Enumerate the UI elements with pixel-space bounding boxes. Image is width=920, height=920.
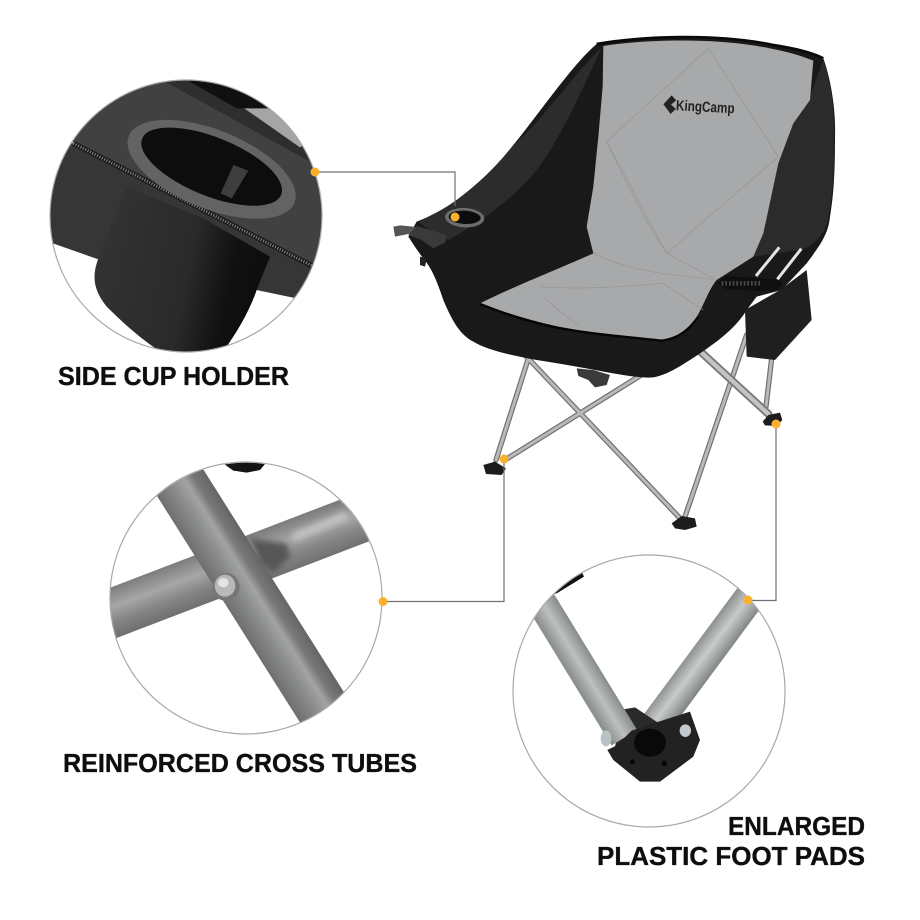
black webbing top	[166, 80, 310, 162]
left side panel dark strip	[418, 48, 601, 240]
circle outline	[50, 80, 322, 352]
left tube	[535, 592, 624, 738]
right bolt	[680, 724, 691, 737]
chair frame tubes	[496, 335, 773, 520]
black frame end	[554, 573, 584, 594]
panel: side cup holder	[49, 79, 323, 386]
cup holder opening	[448, 210, 481, 225]
chair body black outline	[408, 37, 835, 378]
circle outline	[110, 462, 382, 734]
right side panel	[753, 60, 834, 257]
diagonal tube	[170, 467, 330, 720]
detail photo: cup holder	[50, 80, 322, 352]
armrest handle	[393, 225, 420, 237]
black rim at top	[188, 80, 268, 108]
tube shadow at crossing	[250, 538, 290, 573]
holder inner tab	[221, 165, 248, 198]
seat front edge line	[480, 304, 698, 341]
rivet	[212, 573, 240, 601]
gray padded back and seat	[480, 41, 813, 340]
rivet glint	[218, 578, 229, 587]
heading: SIDE CUP HOLDER	[58, 363, 289, 391]
orange marker dots	[310, 168, 780, 606]
rear block piece	[615, 707, 660, 747]
cup pocket	[95, 187, 270, 353]
lower fabric band under the seam	[50, 143, 311, 298]
heading: PLASTIC FOOT PADS	[597, 843, 865, 871]
right arm strap	[717, 276, 783, 292]
back top edge line	[597, 37, 823, 58]
left bolt	[601, 730, 611, 746]
foot pad left	[483, 462, 506, 475]
holder hole	[141, 128, 282, 206]
plastic foot block	[607, 712, 700, 782]
panel: enlarged plastic foot pads	[513, 555, 865, 871]
left arm flap	[420, 257, 427, 267]
cup holder on chair	[445, 207, 485, 228]
tube highlight	[293, 515, 347, 537]
heading: ENLARGED	[728, 813, 865, 841]
rivet highlight	[215, 575, 235, 597]
right tube	[655, 590, 755, 725]
white webbing strips	[756, 247, 801, 279]
frame joint mechanism	[577, 368, 610, 387]
panel: reinforced cross tubes	[63, 460, 417, 778]
cup holder rim	[445, 207, 485, 228]
zipper seam	[73, 143, 315, 267]
black foot at top	[224, 462, 265, 473]
logo wordmark: KingCamp	[676, 98, 735, 117]
logo diamond	[663, 95, 677, 114]
connector line: cup holder	[315, 172, 455, 206]
zipper seam dots	[73, 143, 315, 267]
holder ring	[128, 120, 296, 219]
horizontal tube	[103, 513, 373, 617]
heading	[597, 813, 865, 871]
chair product photo	[393, 37, 835, 530]
left armrest	[408, 226, 447, 248]
white-gray reflection	[244, 108, 302, 148]
KingCamp logo	[663, 95, 735, 117]
foot pad right	[763, 413, 782, 426]
detail photo: foot pad	[535, 572, 755, 782]
connector line: foot pads	[748, 424, 776, 600]
side cooler bag	[745, 270, 812, 360]
detail photo: crossed tubes	[103, 460, 373, 720]
top surface of arm	[72, 82, 322, 264]
heading: REINFORCED CROSS TUBES	[63, 750, 417, 778]
socket hole	[634, 729, 666, 757]
foot pad bottom	[672, 516, 697, 530]
strap ribs	[722, 276, 760, 290]
circle outline	[513, 555, 785, 827]
connector line: cross tubes	[383, 459, 504, 602]
seat stitch lines	[540, 48, 778, 327]
screw holes	[630, 759, 667, 766]
